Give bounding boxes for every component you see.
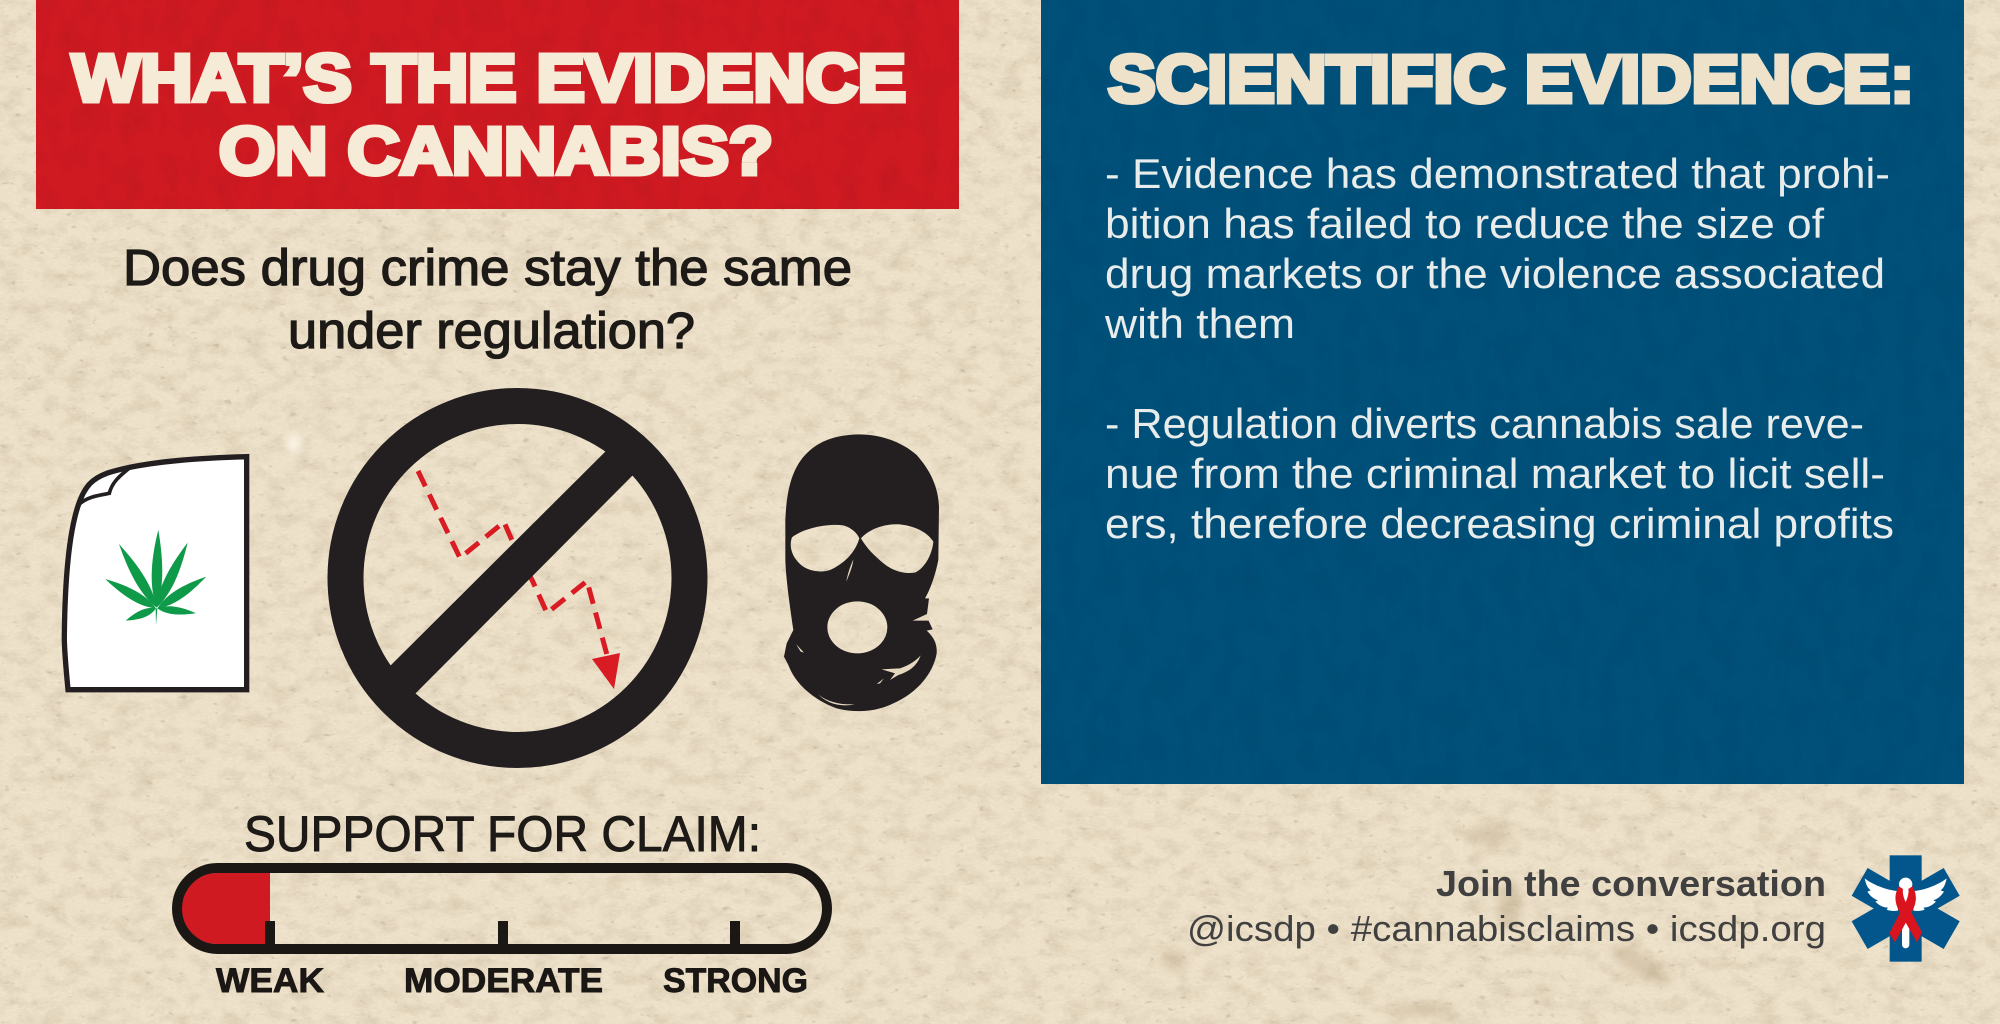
heading: what's the evidence on cannabis: ON CANNABIS? [219, 114, 773, 189]
falling dashed line [418, 471, 620, 689]
heading: what's the evidence on cannabis: WHAT’S THE EVIDENCE [72, 41, 906, 116]
text block: evidence points: nue from the criminal market to licit sell- [1105, 450, 1885, 497]
text block: evidence points: - Regulation diverts cannabis sale reve- [1105, 400, 1864, 447]
gauge labels: WEAK [216, 962, 324, 1000]
text block: evidence points: bition has failed to reduce the size of [1105, 200, 1824, 247]
footer call to action: Join the conversation [1436, 863, 1826, 904]
heading: scientific evidence: SCIENTIFIC EVIDENCE: [1108, 42, 1914, 117]
question text: under regulation? [288, 302, 695, 359]
text block: evidence points: - Evidence has demonstrated that prohi- [1105, 150, 1890, 197]
icon: cannabis packet [64, 457, 247, 690]
icon: cannabis leaf [103, 530, 209, 625]
text block: evidence points [1104, 150, 1894, 547]
text block: evidence points: ers, therefore decreasing criminal profits [1105, 500, 1894, 547]
gauge labels [216, 962, 808, 1000]
support for claim gauge [177, 806, 827, 1000]
text block: evidence points: drug markets or the violence associated [1105, 250, 1885, 297]
gauge heading: SUPPORT FOR CLAIM: [244, 806, 761, 862]
panel: scientific evidence [1041, 0, 1964, 784]
icon: prohibition sign with falling crime line [346, 406, 690, 750]
text block: evidence points: with them [1104, 300, 1295, 347]
gauge bar [177, 868, 827, 949]
heading: what's the evidence on cannabis [72, 41, 906, 189]
question text: Does drug crime stay the same [123, 239, 852, 296]
panel: title banner [36, 0, 959, 209]
icon: balaclava mask [784, 434, 939, 711]
arrow head [592, 653, 620, 689]
gauge labels: MODERATE [404, 962, 603, 1000]
question text [123, 239, 852, 359]
footer call to action [1187, 863, 1826, 949]
gauge labels: STRONG [663, 962, 808, 1000]
icon: ICSDP logo [1852, 855, 1960, 962]
footer call to action: @icsdp • #cannabisclaims • icsdp.org [1187, 908, 1826, 949]
